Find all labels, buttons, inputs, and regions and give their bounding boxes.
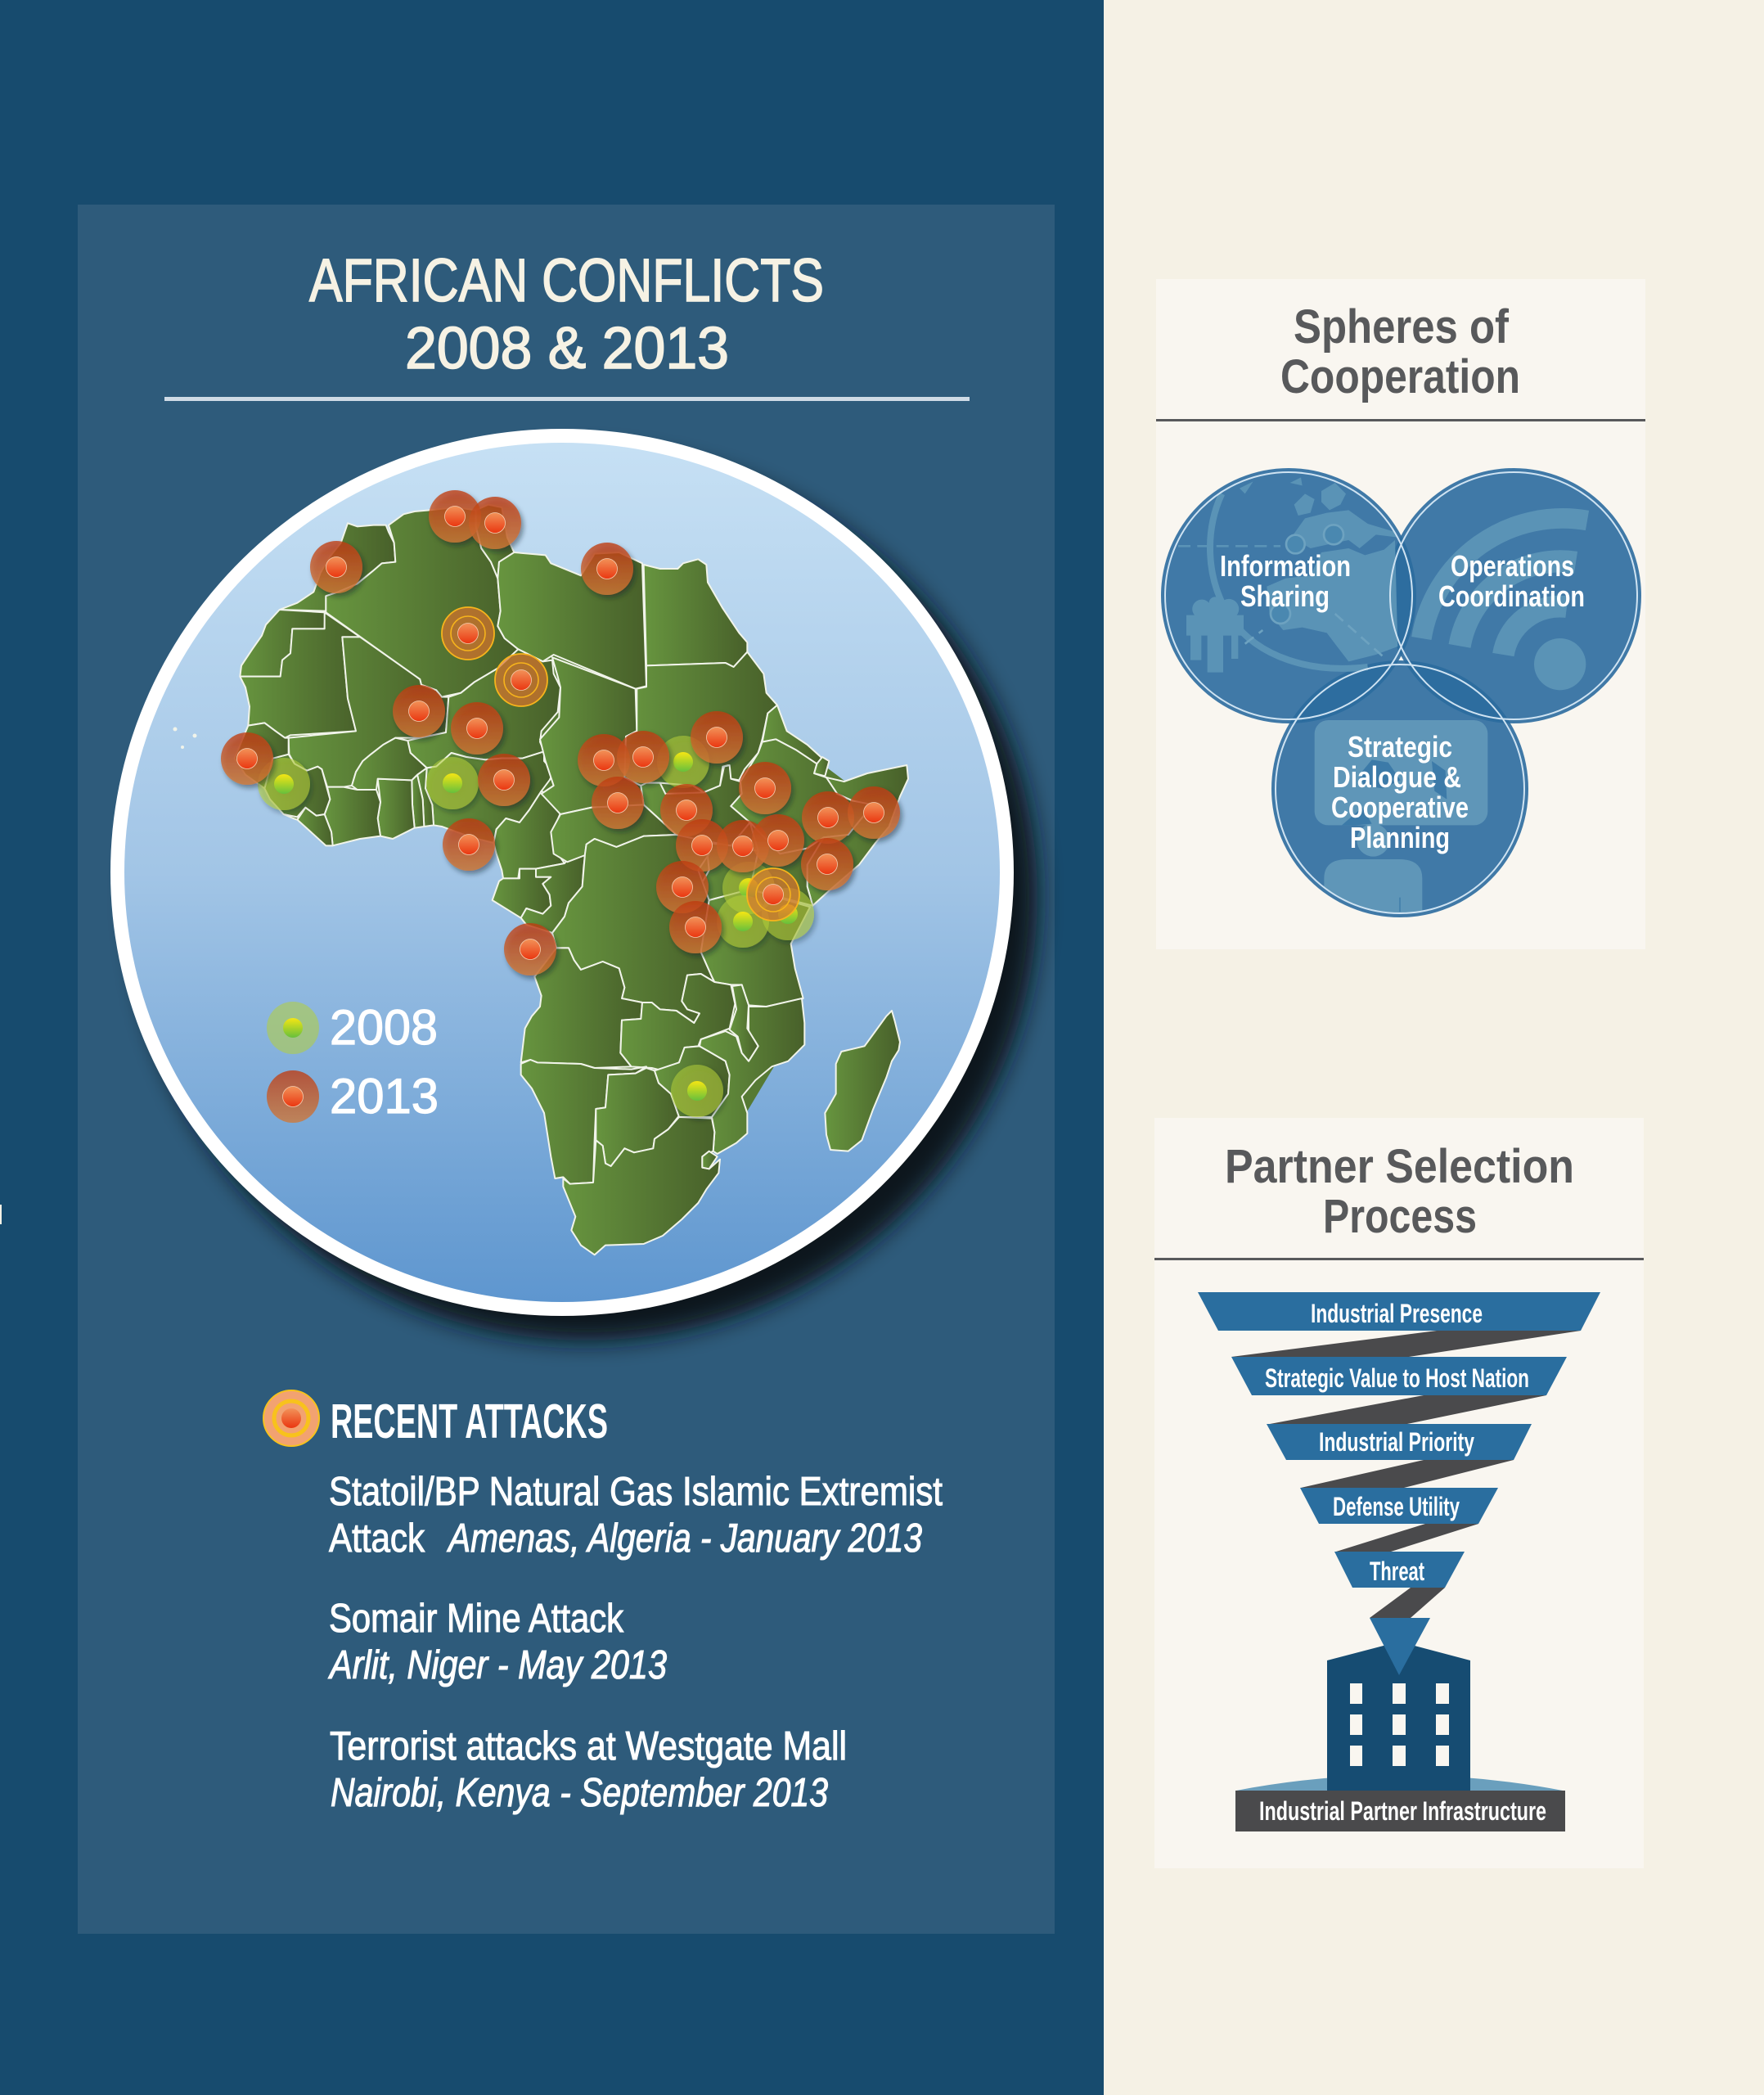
continent base <box>254 524 851 1228</box>
heading rule <box>1156 419 1645 421</box>
attack 3: Nairobi, Kenya - September 2013 <box>331 1771 828 1815</box>
icon: attack target <box>263 1390 319 1446</box>
attack 2 <box>327 1597 667 1687</box>
venn labels: Dialogue & <box>1333 760 1461 794</box>
infrastructure bar <box>1235 1791 1565 1831</box>
title <box>309 246 824 381</box>
venn labels <box>1220 549 1585 854</box>
legend <box>267 1000 439 1124</box>
step: industrial presence: Industrial Presence <box>1311 1299 1483 1328</box>
heading rule <box>1154 1258 1644 1260</box>
globe shadow <box>134 453 1037 1340</box>
northeast countries <box>540 559 908 906</box>
icon: world and people <box>1178 477 1397 673</box>
venn labels: Planning <box>1350 821 1450 854</box>
circle: strategic dialogue <box>1271 660 1528 917</box>
map of Africa <box>173 505 908 1255</box>
step: defense utility <box>1300 1488 1498 1524</box>
attack 1 <box>329 1470 943 1561</box>
attack 3: Terrorist attacks at Westgate Mall <box>330 1724 847 1768</box>
left navy background <box>0 0 1104 2095</box>
step: threat <box>1334 1552 1465 1588</box>
attack 2: Arlit, Niger - May 2013 <box>327 1643 667 1687</box>
circle: information sharing <box>1161 468 1416 723</box>
heading: Partner Selection <box>1225 1140 1574 1193</box>
funnel <box>1198 1292 1600 1618</box>
edge mark <box>0 1205 2 1224</box>
conflict markers <box>221 490 900 1117</box>
panel: spheres of cooperation <box>1156 279 1645 949</box>
step: industrial presence <box>1198 1292 1600 1331</box>
recent attacks <box>263 1390 943 1815</box>
panel: partner selection process <box>1154 1118 1644 1868</box>
venn labels: Operations <box>1451 549 1574 583</box>
venn diagram <box>1161 468 1641 917</box>
globe <box>110 429 1014 1316</box>
heading: Spheres of <box>1294 300 1510 354</box>
southern countries <box>521 835 900 1255</box>
step: industrial priority: Industrial Priority <box>1319 1427 1474 1457</box>
title: 2008 & 2013 <box>405 316 729 381</box>
panel: African conflicts <box>78 205 1055 1934</box>
venn labels: Coordination <box>1438 579 1585 613</box>
recent attacks heading: RECENT ATTACKS <box>331 1394 608 1448</box>
title rule <box>164 397 970 401</box>
funnel connectors <box>1231 1331 1581 1618</box>
legend: 2013 <box>330 1069 439 1124</box>
step: strategic value: Strategic Value to Host Nation <box>1265 1363 1529 1393</box>
2013 markers <box>221 490 900 975</box>
recent attack markers <box>442 607 799 921</box>
2008 markers <box>258 736 814 1117</box>
step: defense utility: Defense Utility <box>1333 1492 1460 1521</box>
northwest countries <box>235 505 646 933</box>
venn labels: Cooperative <box>1331 791 1469 824</box>
icon: speech bubble and person <box>1315 720 1487 912</box>
heading <box>1225 1140 1574 1243</box>
attack 2: Somair Mine Attack <box>329 1597 623 1641</box>
venn labels: Strategic <box>1348 730 1452 764</box>
venn labels: Sharing <box>1240 579 1330 613</box>
circle: operations coordination <box>1386 468 1641 723</box>
venn labels: Information <box>1220 549 1351 583</box>
attack 1: Amenas, Algeria - January 2013 <box>447 1516 922 1561</box>
title: AFRICAN CONFLICTS <box>309 246 824 314</box>
heading: Cooperation <box>1280 350 1520 403</box>
attack 3 <box>330 1724 847 1815</box>
right cream background <box>1104 0 1764 2095</box>
icon: wireless signal <box>1421 518 1587 690</box>
heading <box>1280 300 1520 403</box>
legend: 2008 <box>330 1000 438 1055</box>
attack 1: Attack <box>329 1516 425 1561</box>
attack 1: Statoil/BP Natural Gas Islamic Extremist <box>329 1470 943 1514</box>
step: industrial priority <box>1267 1424 1532 1460</box>
heading: Process <box>1323 1190 1477 1243</box>
infrastructure bar: Industrial Partner Infrastructure <box>1259 1796 1546 1826</box>
step: strategic value <box>1231 1357 1567 1395</box>
Cape Verde islands <box>173 727 196 749</box>
inner rings <box>1165 472 1637 913</box>
icon: building <box>1236 1618 1563 1791</box>
step: threat: Threat <box>1370 1557 1424 1586</box>
